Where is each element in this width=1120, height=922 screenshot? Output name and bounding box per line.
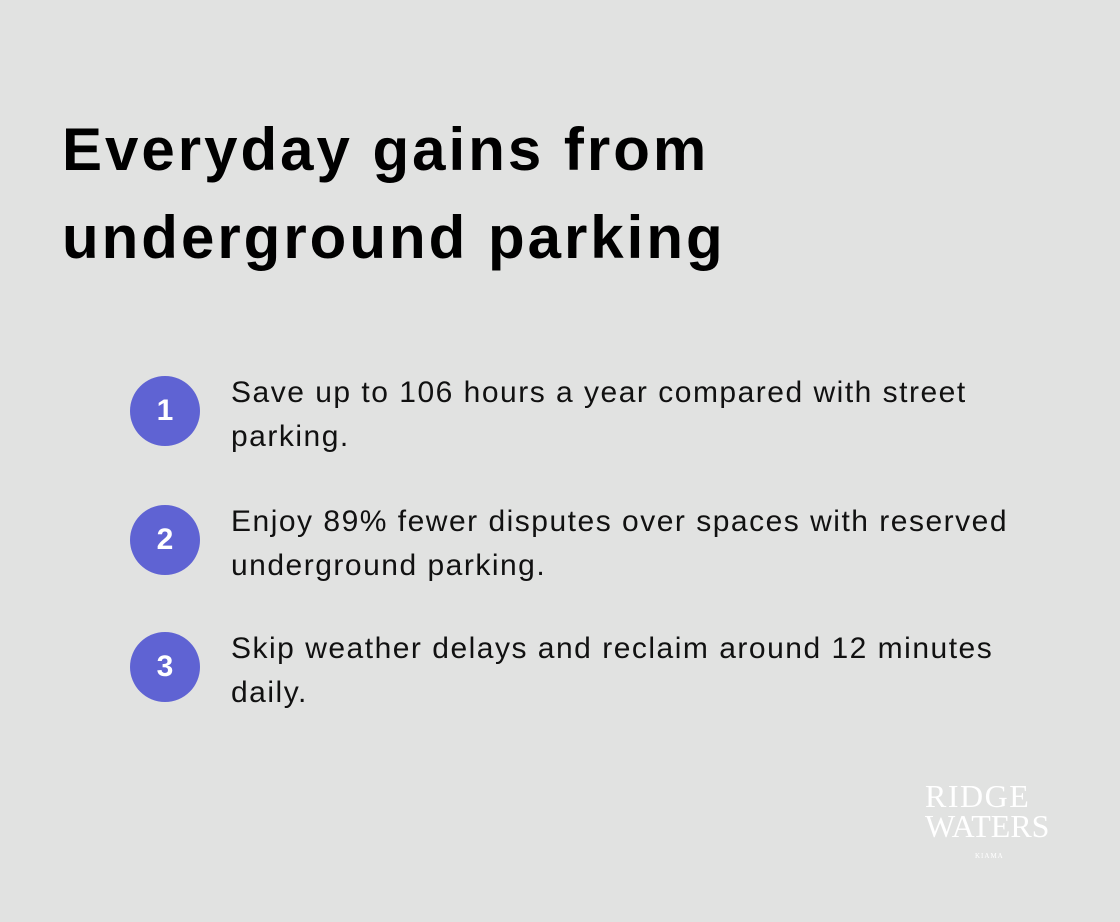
title: underground parking bbox=[62, 204, 726, 271]
logo: WATERS bbox=[925, 808, 1049, 844]
logo: KIAMA bbox=[975, 852, 1004, 860]
number badge 2 bbox=[130, 505, 200, 575]
number badge 1: 1 bbox=[157, 394, 173, 427]
number badge 3 bbox=[130, 632, 200, 702]
text 3: Skip weather delays and reclaim around 12 minutes daily. bbox=[231, 632, 993, 709]
item 2 bbox=[130, 505, 1008, 582]
number badge 2: 2 bbox=[157, 523, 173, 556]
number badge 3: 3 bbox=[157, 650, 173, 683]
item 1 bbox=[130, 376, 967, 453]
title bbox=[62, 116, 726, 271]
logo: RIDGE bbox=[925, 778, 1030, 814]
title: Everyday gains from bbox=[62, 116, 709, 183]
text 1: Save up to 106 hours a year compared with street parking. bbox=[231, 376, 967, 453]
text 2: Enjoy 89% fewer disputes over spaces with reserved underground parking. bbox=[231, 505, 1008, 582]
logo bbox=[925, 778, 1049, 860]
number badge 1 bbox=[130, 376, 200, 446]
item 3 bbox=[130, 632, 993, 709]
